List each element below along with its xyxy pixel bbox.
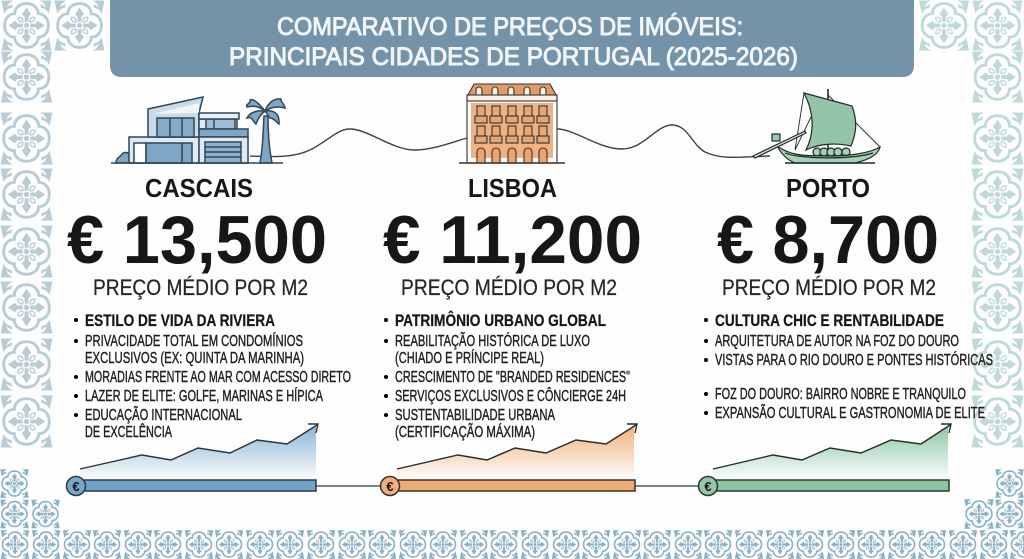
feature list (704, 312, 993, 422)
feature list: LAZER DE ELITE: GOLFE, MARINAS E HÍPICA (85, 386, 323, 405)
feature list (74, 312, 351, 441)
icon: modern house with palm (111, 97, 285, 163)
price caption: PREÇO MÉDIO POR M2 (401, 275, 617, 300)
feature list: ESTILO DE VIDA DA RIVIERA (85, 312, 275, 330)
price bar: Porto (698, 476, 949, 496)
column: Cascais (66, 173, 351, 496)
feature list: PRIVACIDADE TOTAL EM CONDOMÍNIOS (85, 331, 303, 350)
city name: Cascais: CASCAIS (145, 173, 253, 203)
title banner: PRINCIPAIS CIDADES DE PORTUGAL (2025-2026) (229, 43, 798, 71)
feature list: (CHIADO E PRÍNCIPE REAL) (395, 348, 544, 367)
price: Lisboa: € 11,200 (383, 202, 642, 278)
feature list: DE EXCELÊNCIA (85, 422, 172, 441)
price bar: Cascais (66, 476, 316, 496)
feature list: EDUCAÇÃO INTERNACIONAL (85, 404, 242, 424)
price caption: PREÇO MÉDIO POR M2 (93, 275, 308, 300)
feature list: (CERTIFICAÇÃO MÁXIMA) (395, 421, 535, 441)
tile border: left (1, 1, 104, 447)
feature list: SERVIÇOS EXCLUSIVOS E CÔNCIERGE 24H (395, 386, 626, 405)
column: Porto (698, 173, 993, 496)
tile border: bottom (0, 469, 1024, 559)
connector line (316, 485, 699, 487)
feature list: EXCLUSIVOS (EX: QUINTA DA MARINHA) (85, 350, 304, 367)
feature list: REABILITAÇÃO HISTÓRICA DE LUXO (395, 330, 590, 350)
tile border: right (919, 1, 1023, 447)
title banner (110, 0, 914, 77)
feature list: CRESCIMENTO DE "BRANDED RESIDENCES" (395, 369, 630, 386)
feature list: CULTURA CHIC E RENTABILIDADE (715, 312, 944, 330)
feature list (384, 311, 630, 441)
price bar: Lisboa (380, 476, 635, 496)
price bar: Cascais: € (72, 479, 80, 494)
feature list: MORADIAS FRENTE AO MAR COM ACESSO DIRETO (85, 369, 351, 386)
city name: Porto: PORTO (786, 173, 870, 203)
title banner: COMPARATIVO DE PREÇOS DE IMÓVEIS: (277, 12, 743, 41)
column: Lisboa (380, 173, 642, 496)
price: Cascais: € 13,500 (67, 202, 327, 278)
icon: Lisbon historic building (459, 84, 565, 163)
price bar: Lisboa: € (386, 479, 394, 494)
price bar: Porto: € (704, 479, 712, 494)
connecting wave line (250, 125, 770, 157)
feature list: PATRIMÔNIO URBANO GLOBAL (395, 311, 606, 330)
city name: Lisboa: LISBOA (468, 173, 557, 203)
icon: Porto rabelo boat (753, 89, 880, 163)
trend chart: Lisboa (397, 424, 637, 480)
trend chart: Porto (713, 424, 951, 480)
trend chart: Cascais (80, 424, 318, 480)
feature list: SUSTENTABILIDADE URBANA (395, 407, 555, 424)
price: Porto: € 8,700 (717, 202, 939, 278)
price caption: PREÇO MÉDIO POR M2 (722, 275, 936, 300)
